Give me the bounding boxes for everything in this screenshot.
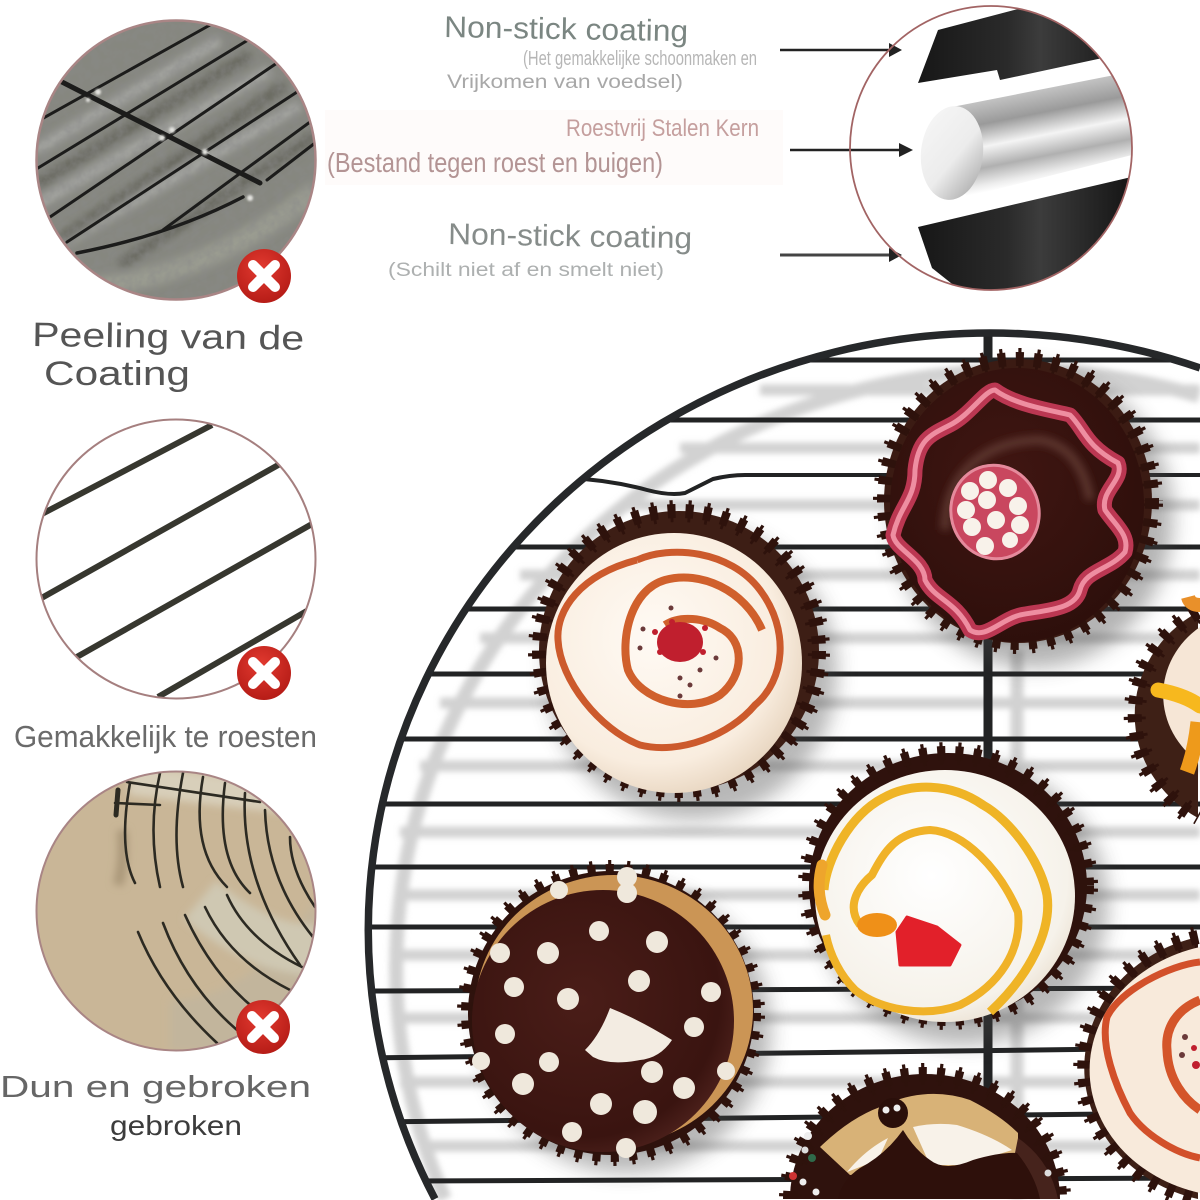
rod cap xyxy=(921,106,984,200)
rack rim xyxy=(368,333,1200,1199)
cake xyxy=(475,875,753,1145)
text: stainless core label xyxy=(327,115,759,178)
meringue xyxy=(585,1008,672,1062)
panel: wire cross-section lens xyxy=(850,6,1140,295)
paper liner xyxy=(809,753,1087,1019)
pink icing xyxy=(893,390,1126,633)
text: top coating label: Non-stick coating xyxy=(444,11,688,48)
inner swirl xyxy=(625,577,762,704)
heading: peeling caption: Peeling van de xyxy=(32,316,304,358)
arrow: bottom coating xyxy=(780,248,902,262)
sprinkles xyxy=(1179,1034,1200,1069)
panel: cooling rack with cupcakes xyxy=(365,333,1200,1199)
chocolate glaze xyxy=(472,890,734,1152)
text: top coating label: (Het gemakkelijke schoonmaken en xyxy=(523,48,757,70)
chocolate glaze xyxy=(838,1130,1040,1199)
text: bottom coating label: Non-stick coating xyxy=(448,218,692,255)
cupcake: white with red-orange swirl xyxy=(539,511,837,820)
outer red swirl xyxy=(1105,962,1200,1158)
paper liner xyxy=(468,871,754,1155)
frosting xyxy=(546,533,802,793)
cupcake: right, red swirl xyxy=(1084,937,1200,1199)
cupcake: bottom, sprinkled chocolate xyxy=(789,1074,1060,1199)
frosting xyxy=(1163,627,1200,763)
text: top coating label xyxy=(444,11,757,93)
inner yellow swirl xyxy=(826,830,1018,1011)
text: stainless core label: Roestvrij Stalen Kern xyxy=(566,115,759,142)
cake xyxy=(820,1094,1018,1175)
panel: thin and broken xyxy=(36,771,316,1054)
rack wires xyxy=(365,333,1200,1199)
lens outline xyxy=(850,6,1132,290)
caption: thin and broken: gebroken xyxy=(110,1110,242,1141)
cupcake: right, orange xyxy=(1135,597,1200,818)
liner teeth xyxy=(1135,612,1198,818)
rack shadows xyxy=(396,370,1200,1199)
red drop xyxy=(897,917,960,965)
liner teeth xyxy=(790,1074,1060,1199)
lower orange piping xyxy=(1187,722,1198,772)
cupcake: chocolate with pink icing xyxy=(884,359,1173,668)
tan surface with broken wires xyxy=(36,771,316,1051)
orange drop xyxy=(857,913,897,937)
paper liner xyxy=(539,511,819,791)
label background tint xyxy=(325,110,783,185)
text: bottom coating label xyxy=(388,218,692,281)
frosting xyxy=(1090,947,1200,1193)
chocolate swirl xyxy=(945,440,1090,530)
paper liner xyxy=(884,359,1152,643)
centre with pearls xyxy=(940,455,1050,569)
caption: rust: Gemakkelijk te roesten xyxy=(14,719,317,754)
upper black coating xyxy=(918,9,1100,83)
heading: peeling caption: Coating xyxy=(44,355,190,393)
chocolate top xyxy=(890,368,1144,642)
panel: peeling coating xyxy=(36,20,316,303)
diagonal wires xyxy=(38,425,312,697)
text: stainless core label: (Bestand tegen roest en buigen) xyxy=(327,147,663,178)
arrow: steel core xyxy=(790,143,913,157)
left white icing xyxy=(847,1138,888,1172)
inner red swirl xyxy=(1167,1000,1200,1110)
white icing xyxy=(913,1124,1012,1165)
heading: peeling caption xyxy=(32,316,304,393)
caption: thin and broken xyxy=(0,1069,311,1141)
icon: red cross xyxy=(237,249,291,303)
red sprinkles xyxy=(652,619,708,662)
icon: red cross xyxy=(236,1000,290,1054)
yellow piping xyxy=(1158,690,1200,706)
rim of circle xyxy=(36,772,316,1050)
lower black coating xyxy=(918,178,1128,290)
outer yellow swirl xyxy=(824,787,1048,1012)
liner teeth xyxy=(1084,937,1198,1199)
pearls xyxy=(472,867,735,1158)
cupcake: white with yellow swirl xyxy=(809,753,1108,1045)
text: bottom coating label: (Schilt niet af en smelt niet) xyxy=(388,260,664,281)
panel: rust wires xyxy=(36,420,316,700)
cupcake: chocolate with white pearls xyxy=(468,867,771,1173)
text: top coating label: Vrijkomen van voedsel) xyxy=(447,72,683,93)
rim of circle xyxy=(36,420,316,698)
dark sprinkles xyxy=(638,606,718,698)
orange piping xyxy=(1188,597,1200,605)
left sprinkles xyxy=(789,1132,1052,1196)
rim of circle xyxy=(36,20,316,300)
frosting xyxy=(815,770,1075,1022)
arrow: top coating xyxy=(780,43,902,57)
stainless rod xyxy=(956,76,1132,192)
icing highlight xyxy=(893,390,1126,633)
icon: red cross xyxy=(237,646,291,700)
left orange blob xyxy=(819,865,825,915)
dark ball with sprinkles xyxy=(878,1098,908,1128)
outer swirl xyxy=(558,552,780,748)
right liner band xyxy=(1015,1138,1058,1199)
grey peeled surface xyxy=(36,20,316,300)
caption: thin and broken: Dun en gebroken xyxy=(0,1069,311,1104)
